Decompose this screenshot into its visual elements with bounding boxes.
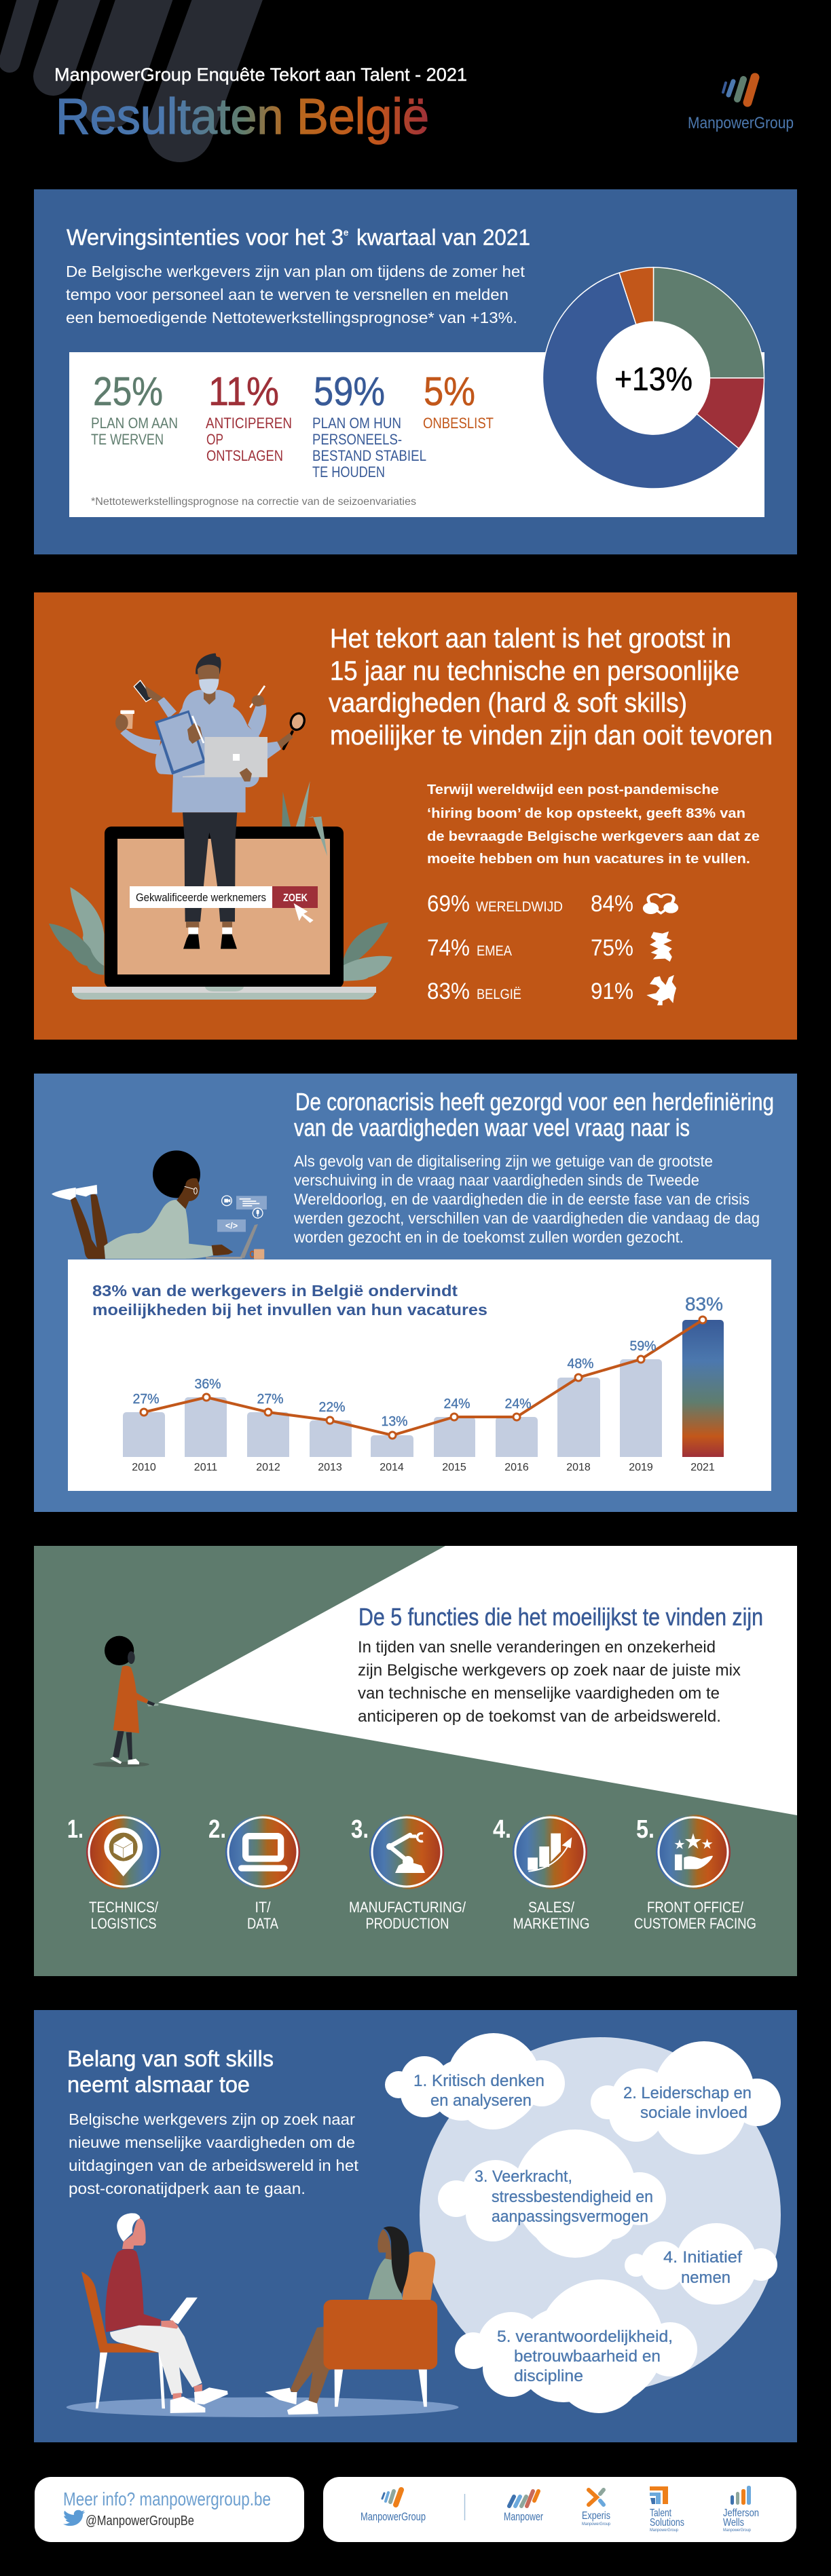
icons: regional emblems bbox=[643, 894, 678, 1005]
illustration: woman with flashlight bbox=[93, 1636, 158, 1767]
logo: Talent Solutions bbox=[650, 2486, 684, 2533]
paragraph: Terwijl wereldwijd een post-pandemische bbox=[427, 782, 719, 797]
cloud texts: betrouwbaarheid en bbox=[514, 2347, 661, 2366]
illustration: multitasking person bbox=[115, 654, 327, 949]
logo: Jefferson Wells: ManpowerGroup bbox=[723, 2528, 752, 2533]
logo: ManpowerGroup small bbox=[361, 2490, 426, 2523]
intro text: een bemoedigende Nettotewerkstellingsprognose* van +13%. bbox=[66, 309, 517, 326]
paragraph bbox=[358, 1638, 741, 1726]
intro text bbox=[66, 263, 525, 326]
stat: 5%: 5% bbox=[424, 369, 475, 414]
icon 1: technics / logistics bbox=[67, 1815, 161, 1932]
chart title: 83% van de werkgevers in België ondervindt bbox=[92, 1282, 458, 1300]
stat: 59%: TE HOUDEN bbox=[312, 463, 385, 480]
intro text: tempo voor personeel aan te werven te versnellen en melden bbox=[66, 286, 509, 303]
paragraph: uitdagingen van de arbeidswereld in het bbox=[69, 2157, 359, 2174]
illustration: interview bbox=[67, 2213, 459, 2417]
icon 4: sales / marketing bbox=[493, 1815, 589, 1932]
logo: Talent Solutions: Solutions bbox=[650, 2517, 684, 2528]
icon 4: sales / marketing: SALES/ bbox=[528, 1899, 575, 1916]
cloud texts: en analyseren bbox=[430, 2091, 532, 2110]
stat: 11% bbox=[206, 369, 292, 464]
clouds bbox=[385, 2033, 781, 2413]
logo: ManpowerGroup: ManpowerGroup bbox=[688, 114, 794, 132]
icon: cursor bbox=[294, 903, 314, 923]
paragraph: de bevraagde Belgische werkgevers aan dat ze bbox=[427, 829, 760, 844]
paragraph: moeite hebben om hun vacatures in te vullen. bbox=[427, 852, 750, 867]
stats by region: 75% bbox=[591, 935, 633, 961]
footer card: contact: Meer info? manpowergroup.be bbox=[63, 2488, 271, 2509]
logo: Jefferson Wells: Wells bbox=[723, 2517, 744, 2528]
logo: ManpowerGroup small: ManpowerGroup bbox=[361, 2510, 426, 2523]
cloud texts: 3. Veerkracht, bbox=[475, 2167, 572, 2186]
panel: soft skills bbox=[34, 2010, 797, 2442]
illustration: woman with laptop bbox=[52, 1150, 267, 1259]
stat: 11%: ONTSLAGEN bbox=[206, 447, 283, 464]
bar chart: 2019 bbox=[629, 1462, 653, 1473]
bar chart: 48% bbox=[568, 1357, 594, 1371]
logo: Experis: Experis bbox=[582, 2510, 610, 2522]
stat: 5%: ONBESLIST bbox=[423, 415, 494, 432]
paragraph: nieuwe menselijke vaardigheden om de bbox=[69, 2134, 355, 2151]
stats by region: 74% bbox=[427, 935, 470, 961]
paragraph: Als gevolg van de digitalisering zijn we getuige van de grootste bbox=[294, 1152, 713, 1170]
bar chart: 36% bbox=[194, 1377, 221, 1392]
illustration: laptop bbox=[72, 827, 376, 1000]
bar chart: 59% bbox=[630, 1339, 657, 1354]
bar chart: 2010 bbox=[132, 1462, 156, 1473]
stat: 11%: 11% bbox=[208, 369, 279, 414]
chart title: moeilijkheden bij het invullen van hun vacatures bbox=[92, 1301, 487, 1319]
stat: 25%: PLAN OM AAN bbox=[91, 415, 178, 432]
cloud texts: discipline bbox=[514, 2367, 583, 2385]
main title: Resultaten België bbox=[56, 88, 429, 145]
bar chart: 24% bbox=[505, 1397, 532, 1412]
stat: 11%: ANTICIPEREN bbox=[206, 415, 292, 432]
stats by region: 83% bbox=[427, 979, 470, 1004]
icon 1: technics / logistics: TECHNICS/ bbox=[89, 1899, 159, 1916]
stat: 59%: PLAN OM HUN bbox=[312, 415, 401, 432]
cloud texts: stressbestendigheid en bbox=[492, 2188, 653, 2206]
icon 4: sales / marketing: MARKETING bbox=[513, 1915, 589, 1932]
bar chart: 2021 bbox=[690, 1462, 715, 1473]
stat: 59%: BESTAND STABIEL bbox=[312, 447, 426, 464]
bar chart: 2015 bbox=[442, 1462, 466, 1473]
panel: tekort aan talent bbox=[34, 592, 797, 1040]
intro text: De Belgische werkgevers zijn van plan om tijdens de zomer het bbox=[66, 263, 525, 280]
icon 2: IT / data bbox=[208, 1815, 300, 1932]
white stats box bbox=[69, 352, 764, 517]
heading: kwartaal van 2021 bbox=[356, 225, 530, 250]
cloud texts bbox=[413, 2072, 752, 2385]
paragraph: verschuiving in de vraag naar vaardigheden sinds de Tweede bbox=[294, 1171, 699, 1189]
panel: herdefiniëring vaardigheden bbox=[34, 1074, 797, 1512]
heading bbox=[294, 1088, 774, 1141]
paragraph bbox=[69, 2110, 359, 2197]
paragraph: van technische en menselijke vaardigheden om te bbox=[358, 1684, 720, 1703]
heading: De 5 functies die het moeilijkst te vinden zijn bbox=[358, 1603, 763, 1631]
search bar bbox=[130, 886, 318, 908]
panel: wervingsintenties bbox=[34, 189, 797, 554]
panel: 5 functies bbox=[34, 1546, 797, 1976]
paragraph: anticiperen op de toekomst van de arbeidswereld. bbox=[358, 1707, 721, 1726]
icon 1: technics / logistics: 1. bbox=[67, 1815, 84, 1844]
logo: Jefferson Wells bbox=[723, 2486, 759, 2533]
icon 5: front office / customer facing bbox=[634, 1815, 756, 1932]
logo: Experis bbox=[582, 2490, 611, 2526]
heading bbox=[329, 624, 773, 751]
bar chart: 27% bbox=[257, 1392, 284, 1407]
stats by region: 91% bbox=[591, 979, 633, 1004]
bar chart: 13% bbox=[382, 1414, 408, 1429]
paragraph bbox=[427, 782, 760, 867]
footnote: *Nettotewerkstellingsprognose na correctie van de seizoenvariaties bbox=[91, 496, 416, 508]
heading: e bbox=[344, 227, 348, 238]
header subtitle: ManpowerGroup Enquête Tekort aan Talent - 2021 bbox=[54, 64, 467, 85]
stat: 59%: PERSONEELS- bbox=[312, 431, 402, 448]
logo: Experis: ManpowerGroup bbox=[582, 2522, 611, 2526]
cloud texts: aanpassingsvermogen bbox=[492, 2208, 648, 2226]
heading bbox=[67, 225, 530, 250]
stat: 25% bbox=[91, 369, 178, 448]
heading: Belang van soft skills bbox=[67, 2046, 274, 2071]
stats by region: EMEA bbox=[477, 943, 512, 959]
footer card: brand logos bbox=[323, 2477, 796, 2542]
spotlight beam bbox=[158, 1546, 797, 1815]
chart title bbox=[92, 1282, 487, 1319]
illustration: leaves behind laptop bbox=[49, 781, 310, 975]
bar chart: 83% bbox=[685, 1293, 723, 1314]
bar chart: 24% bbox=[444, 1397, 470, 1412]
donut chart: +13% bbox=[614, 362, 692, 398]
chart card bbox=[68, 1259, 771, 1491]
heading bbox=[67, 2046, 274, 2097]
paragraph: Wereldoorlog, en de vaardigheden die in de eerste fase van de crisis bbox=[294, 1190, 750, 1208]
cloud texts: 2. Leiderschap en bbox=[623, 2084, 752, 2102]
heading: neemt alsmaar toe bbox=[67, 2072, 250, 2097]
bar chart: 2014 bbox=[380, 1462, 404, 1473]
logo: ManpowerGroup bbox=[688, 77, 794, 132]
paragraph: Belgische werkgevers zijn op zoek naar bbox=[69, 2110, 355, 2128]
heading: vaardigheden (hard & soft skills) bbox=[329, 688, 687, 718]
stats by region: 84% bbox=[591, 891, 633, 917]
heading: Het tekort aan talent is het grootst in bbox=[330, 624, 731, 654]
logo: Manpower bbox=[504, 2491, 543, 2523]
paragraph: werden gezocht, verschillen van de vaardigheden die vandaag de dag bbox=[293, 1209, 760, 1227]
heading: van de vaardigheden waar veel vraag naar is bbox=[294, 1114, 690, 1141]
icon 2: IT / data: DATA bbox=[247, 1915, 278, 1932]
cloud texts: sociale invloed bbox=[640, 2104, 747, 2122]
header background stripes bbox=[10, 0, 232, 129]
icon 3: manufacturing / production: 3. bbox=[351, 1815, 369, 1844]
bar chart: 2011 bbox=[194, 1462, 217, 1473]
icon 2: IT / data: 2. bbox=[208, 1815, 226, 1844]
cloud texts: 4. Initiatief bbox=[663, 2248, 742, 2267]
search bar: ZOEK bbox=[283, 892, 308, 904]
paragraph: ‘hiring boom’ de kop opsteekt, geeft 83% van bbox=[427, 806, 745, 821]
icon 3: manufacturing / production bbox=[349, 1815, 466, 1932]
footer card: contact bbox=[35, 2477, 304, 2542]
donut chart bbox=[542, 267, 764, 489]
illustration: right leaves bbox=[344, 922, 392, 981]
paragraph: zijn Belgische werkgevers op zoek naar de juiste mix bbox=[358, 1661, 741, 1680]
stat: 59%: 59% bbox=[314, 369, 385, 414]
divider bbox=[464, 2494, 466, 2520]
stat: 5% bbox=[423, 369, 494, 432]
icon 5: front office / customer facing: CUSTOMER FACING bbox=[634, 1915, 756, 1932]
cloud texts: 1. Kritisch denken bbox=[413, 2072, 544, 2090]
logo: Jefferson Wells: Jefferson bbox=[723, 2507, 759, 2519]
icon 5: front office / customer facing: FRONT OFFICE/ bbox=[647, 1899, 744, 1916]
icon 3: manufacturing / production: PRODUCTION bbox=[365, 1915, 449, 1932]
logo: Manpower: Manpower bbox=[504, 2510, 543, 2523]
illustration: woman with laptop: </> bbox=[225, 1221, 238, 1231]
icon 1: technics / logistics: LOGISTICS bbox=[91, 1915, 156, 1932]
icon 5: front office / customer facing: 5. bbox=[636, 1815, 654, 1844]
heading: moeilijker te vinden zijn dan ooit tevoren bbox=[330, 721, 773, 751]
stats by region: 69% bbox=[427, 891, 470, 917]
heading: 15 jaar nu technische en persoonlijke bbox=[330, 656, 739, 686]
bar chart: 22% bbox=[319, 1400, 346, 1415]
cloud texts: 5. verantwoordelijkheid, bbox=[497, 2328, 673, 2346]
paragraph bbox=[293, 1152, 760, 1246]
footer card: contact: @ManpowerGroupBe bbox=[86, 2514, 194, 2528]
stats by region bbox=[427, 891, 633, 1004]
search bar: Gekwalificeerde werknemers bbox=[136, 891, 266, 904]
large background circle bbox=[420, 2037, 781, 2393]
icon 2: IT / data: IT/ bbox=[255, 1899, 271, 1916]
paragraph: In tijden van snelle veranderingen en onzekerheid bbox=[358, 1638, 716, 1656]
bar chart bbox=[123, 1293, 724, 1473]
bar chart: 27% bbox=[133, 1392, 160, 1407]
heading: Wervingsintenties voor het 3 bbox=[67, 225, 344, 250]
paragraph: post-coronatijdperk aan te gaan. bbox=[69, 2180, 306, 2197]
stat: 11%: OP bbox=[206, 431, 223, 448]
cloud texts: nemen bbox=[681, 2269, 731, 2287]
icon 3: manufacturing / production: MANUFACTURING/ bbox=[349, 1899, 466, 1916]
icon 4: sales / marketing: 4. bbox=[493, 1815, 511, 1844]
logo: Talent Solutions: Talent bbox=[650, 2507, 671, 2519]
stats by region: WERELDWIJD bbox=[476, 899, 563, 915]
bar chart: 2013 bbox=[318, 1462, 342, 1473]
icon: twitter bbox=[63, 2510, 85, 2526]
stat: 25%: 25% bbox=[93, 369, 163, 414]
paragraph: worden gezocht en in de toekomst zullen worden gezocht. bbox=[293, 1228, 684, 1246]
stats by region: BELGIË bbox=[477, 987, 521, 1002]
bar chart: 2018 bbox=[566, 1462, 591, 1473]
stat: 59% bbox=[312, 369, 426, 480]
bar chart: 2012 bbox=[256, 1462, 280, 1473]
bar chart: 2016 bbox=[504, 1462, 529, 1473]
logo: Talent Solutions: ManpowerGroup bbox=[650, 2528, 679, 2533]
stat: 25%: TE WERVEN bbox=[91, 431, 164, 448]
